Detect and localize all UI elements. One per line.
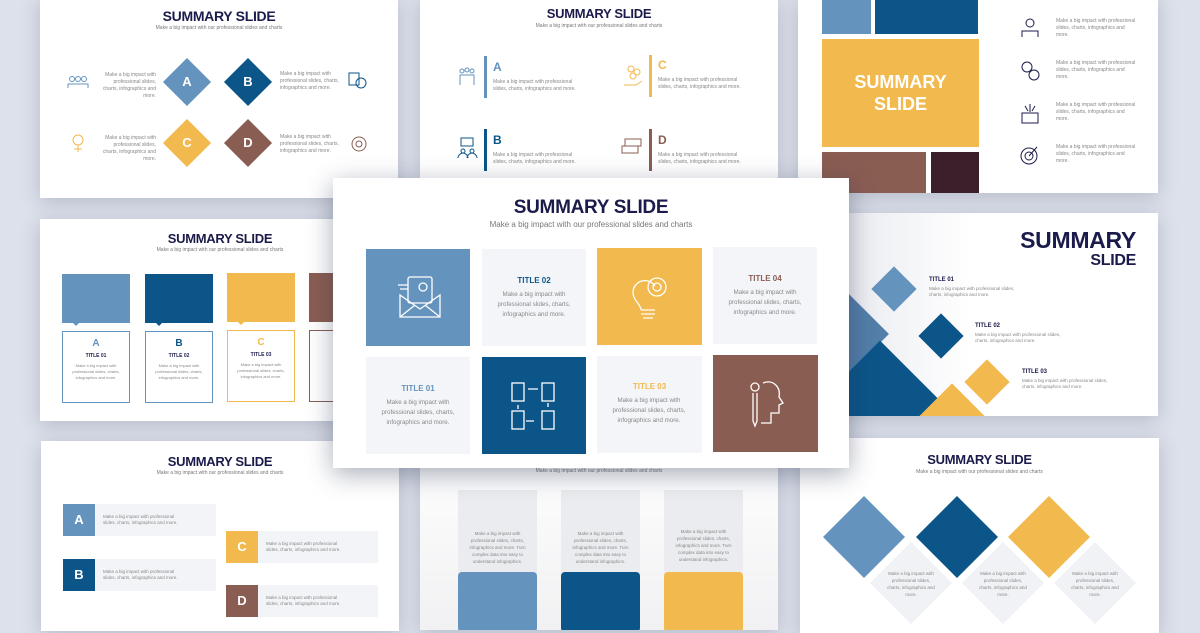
diamond B xyxy=(224,58,272,106)
colored diamonds xyxy=(823,496,1090,578)
subtitle: Make a big impact with our professional slides and charts xyxy=(157,247,283,253)
card C: TITLE 03 xyxy=(251,352,271,358)
slide: center featured summary xyxy=(333,178,849,468)
text A: Make a big impact with professional slides, charts, infographics and more. xyxy=(103,72,156,99)
block light blue xyxy=(822,0,871,34)
column 2: Make a big impact with professional slides, charts, infographics and more. Turn complex data into easy to understand infographics. xyxy=(572,531,629,564)
slide: middle-left cards xyxy=(40,219,400,421)
row 3: Make a big impact with professional slides, charts, infographics and more. xyxy=(1056,102,1135,122)
row A: Make a big impact with professional slides, charts, infographics and more. xyxy=(103,514,178,525)
row B xyxy=(63,559,216,591)
item A xyxy=(460,56,576,98)
block brown xyxy=(822,152,926,193)
card D xyxy=(309,273,333,402)
diamond A: A xyxy=(182,74,192,89)
item 1: TITLE 01 xyxy=(929,277,954,283)
tile: head pencil icon xyxy=(713,355,818,452)
tile: title 04 xyxy=(713,247,817,344)
tile: title 01: TITLE 01 xyxy=(401,384,435,393)
card A xyxy=(62,274,130,403)
item 1: Make a big impact with professional slides, charts, infographics and more. xyxy=(929,286,1014,297)
tile: title 03: Make a big impact with professional slides, charts, infographics and more. xyxy=(613,397,685,424)
heading: SUMMARY SLIDE xyxy=(168,231,272,246)
subtitle: Make a big impact with our professional slides and charts xyxy=(536,23,662,29)
text C: Make a big impact with professional slides, charts, infographics and more. xyxy=(103,135,156,162)
item 3 xyxy=(964,360,1107,404)
column 2 xyxy=(561,490,640,630)
text B: Make a big impact with professional slides, charts, infographics and more. xyxy=(280,71,339,91)
icon: award xyxy=(72,134,84,152)
item C: C xyxy=(658,58,667,72)
tile: documents icon xyxy=(482,357,586,454)
card C: C xyxy=(257,337,265,348)
white diamonds with text: Make a big impact with professional slides, charts, infographics and more. xyxy=(979,571,1027,597)
diamond A xyxy=(163,58,211,106)
item B xyxy=(458,129,576,171)
icon: team xyxy=(68,76,88,88)
row A: A xyxy=(74,512,84,527)
heading: SUMMARY SLIDE xyxy=(168,454,272,469)
subtitle: Make a big impact with our professional slides and charts xyxy=(916,469,1043,475)
heading: SUMMARY SLIDE xyxy=(514,197,668,218)
card A: A xyxy=(92,338,100,349)
column 1 xyxy=(458,490,537,630)
item B: B xyxy=(493,133,502,147)
card B: Make a big impact with professional slides, charts, infographics and more. xyxy=(155,363,203,380)
heading: SUMMARY SLIDE xyxy=(547,6,651,21)
tile: title 02: Make a big impact with professional slides, charts, infographics and more. xyxy=(498,291,570,318)
tile: title 02 xyxy=(482,249,586,346)
card C: Make a big impact with professional slides, charts, infographics and more. xyxy=(237,362,285,379)
item D: Make a big impact with professional slides, charts, infographics and more. xyxy=(658,152,741,165)
row 2: Make a big impact with professional slides, charts, infographics and more. xyxy=(1056,60,1135,80)
slide: top-left diamonds xyxy=(40,0,398,198)
slide: bottom-middle columns xyxy=(420,440,778,630)
row C xyxy=(226,531,378,563)
subtitle: Make a big impact with our professional slides and charts xyxy=(490,220,692,229)
slide: bottom-right diamonds xyxy=(800,438,1159,633)
row B: Make a big impact with professional slides, charts, infographics and more. xyxy=(103,569,178,580)
row 2 xyxy=(1022,60,1135,80)
subtitle: Make a big impact with our professional slides and charts xyxy=(156,25,282,31)
tile: title 03: TITLE 03 xyxy=(633,382,666,391)
diamond B: B xyxy=(243,74,253,89)
slide: bottom-left rows xyxy=(41,441,399,631)
row 3 xyxy=(1022,102,1135,124)
yellow title block xyxy=(822,39,979,147)
card B xyxy=(145,274,213,403)
heading: SUMMARY SLIDE xyxy=(163,8,275,24)
tile: title 04: TITLE 04 xyxy=(748,274,782,283)
item A: Make a big impact with professional slides, charts, infographics and more. xyxy=(493,79,576,92)
subtitle: Make a big impact with our professional slides and charts xyxy=(536,468,662,474)
item 3: Make a big impact with professional slides, charts, infographics and more. xyxy=(1022,378,1107,389)
item C xyxy=(624,55,741,97)
column 3 xyxy=(664,490,743,630)
card A: Make a big impact with professional slides, charts, infographics and more. xyxy=(72,363,120,380)
slide: middle-right diamonds xyxy=(822,213,1158,416)
block dark xyxy=(931,152,979,193)
icon: target xyxy=(352,136,366,152)
column 3: Make a big impact with professional slides, charts, infographics and more. Turn complex data into easy to understand infographics. xyxy=(675,529,732,562)
text D: Make a big impact with professional slides, charts, infographics and more. xyxy=(280,134,339,154)
heading: SUMMARY xyxy=(1020,227,1136,253)
yellow title block: SLIDE xyxy=(874,94,927,114)
row B: B xyxy=(74,567,84,582)
heading line 2: SLIDE xyxy=(1090,252,1136,269)
item A: A xyxy=(493,60,502,74)
slide: top-middle bars xyxy=(420,0,778,178)
row C: C xyxy=(237,539,247,554)
row C: Make a big impact with professional slides, charts, infographics and more. xyxy=(266,541,341,552)
card B: B xyxy=(175,338,183,349)
card B: TITLE 02 xyxy=(169,353,189,359)
white diamonds with text xyxy=(870,542,1136,624)
row 1 xyxy=(1022,18,1135,38)
tile: title 01: Make a big impact with professional slides, charts, infographics and more. xyxy=(382,399,454,426)
yellow title block: SUMMARY xyxy=(854,72,947,92)
item 3: TITLE 03 xyxy=(1022,369,1047,375)
item 1 xyxy=(872,266,1014,312)
large diamonds xyxy=(849,294,984,416)
item D: D xyxy=(658,133,667,147)
row D: Make a big impact with professional slides, charts, infographics and more. xyxy=(266,595,341,606)
tile: title 04: Make a big impact with professional slides, charts, infographics and more. xyxy=(729,289,801,316)
row 1: Make a big impact with professional slides, charts, infographics and more. xyxy=(1056,18,1135,38)
slide: top-right blocks xyxy=(798,0,1158,193)
tile: title 01 xyxy=(366,357,470,454)
diamond D xyxy=(224,119,272,167)
subtitle: Make a big impact with our professional slides and charts xyxy=(157,470,283,476)
item C: Make a big impact with professional slides, charts, infographics and more. xyxy=(658,77,741,90)
column 1: Make a big impact with professional slides, charts, infographics and more. Turn complex data into easy to understand infographics. xyxy=(469,531,526,564)
tile: title 03 xyxy=(597,356,702,453)
item 2 xyxy=(918,314,1060,358)
tile: bulb gear icon xyxy=(597,248,702,345)
row 4: Make a big impact with professional slides, charts, infographics and more. xyxy=(1056,144,1135,164)
white diamonds with text: Make a big impact with professional slides, charts, infographics and more. xyxy=(887,571,935,597)
block navy xyxy=(875,0,978,34)
tile: title 02: TITLE 02 xyxy=(517,276,551,285)
icon: money xyxy=(348,72,366,88)
heading: SUMMARY SLIDE xyxy=(927,452,1032,467)
row 4 xyxy=(1020,144,1135,164)
card A: TITLE 01 xyxy=(86,353,106,359)
row D xyxy=(226,585,378,617)
item 2: TITLE 02 xyxy=(975,323,1000,329)
diamond D: D xyxy=(243,135,253,150)
diamond C xyxy=(163,119,211,167)
item D xyxy=(622,129,741,171)
item B: Make a big impact with professional slides, charts, infographics and more. xyxy=(493,152,576,165)
row D: D xyxy=(237,593,247,608)
white diamonds with text: Make a big impact with professional slides, charts, infographics and more. xyxy=(1071,571,1119,597)
item 2: Make a big impact with professional slides, charts, infographics and more. xyxy=(975,332,1060,343)
list rows xyxy=(1020,18,1135,164)
card C xyxy=(227,273,295,402)
tile: envelope icon xyxy=(366,249,470,346)
diamond C: C xyxy=(182,135,192,150)
row A xyxy=(63,504,216,536)
